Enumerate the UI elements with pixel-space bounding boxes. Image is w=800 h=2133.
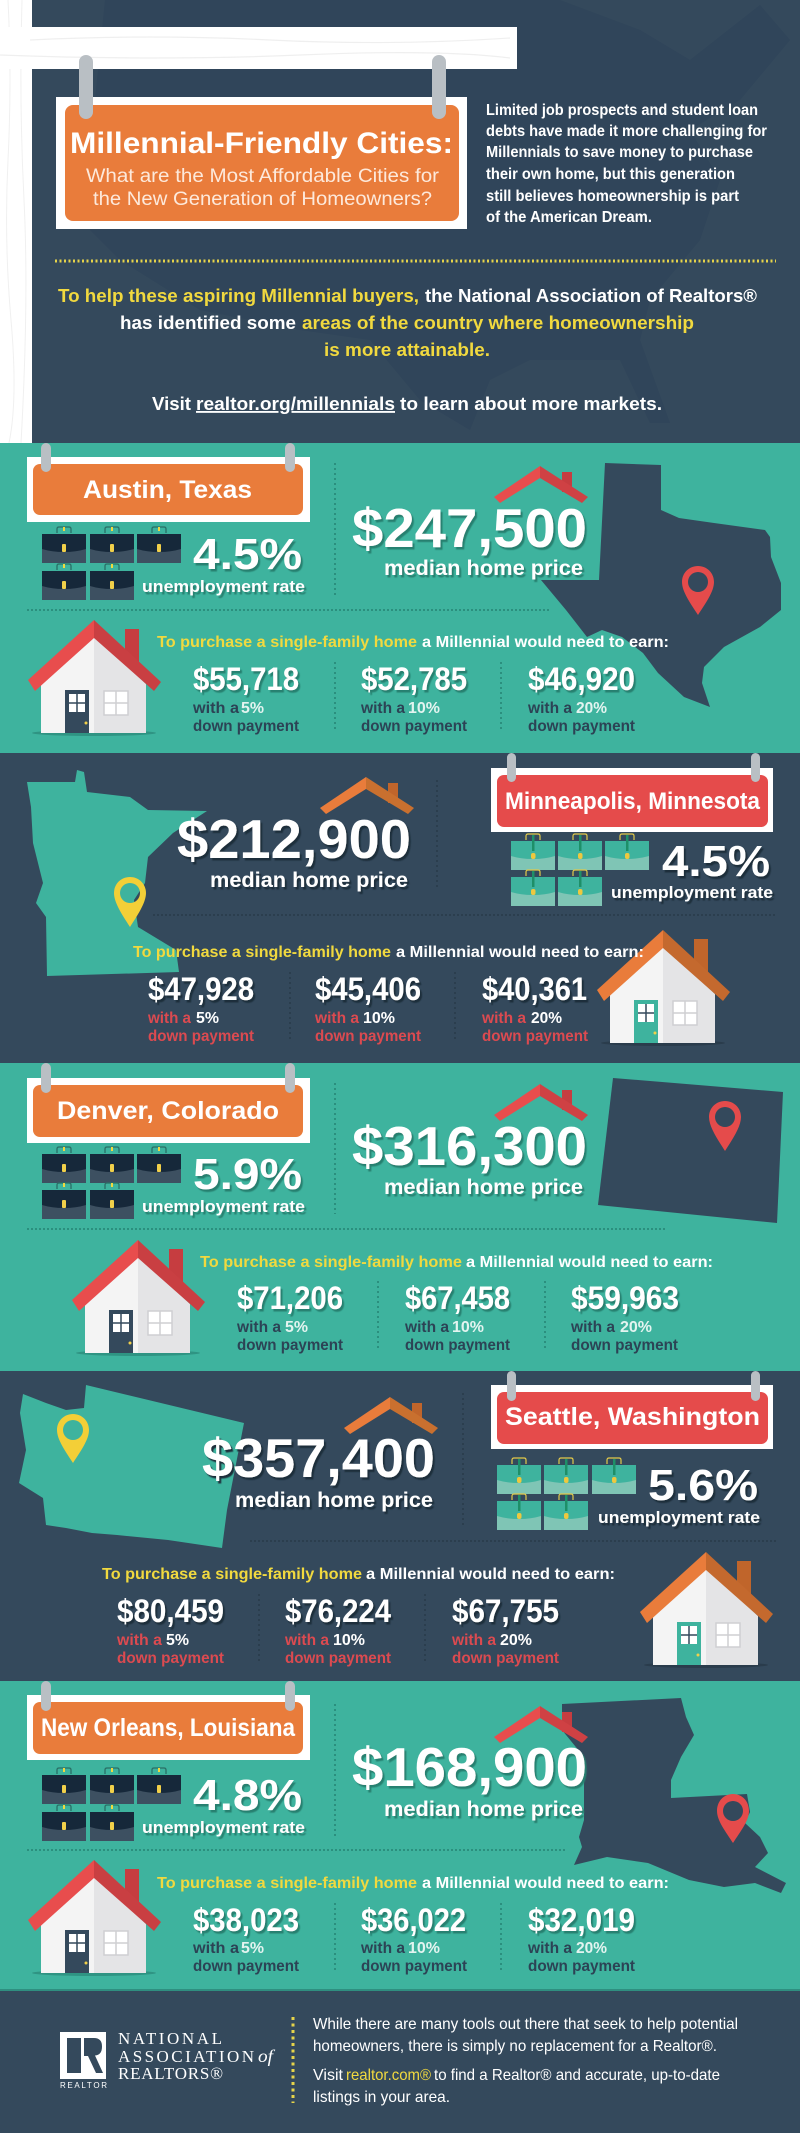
income block: 5% — [241, 1940, 264, 1957]
income block: $67,458 — [405, 1280, 510, 1316]
pin — [717, 1794, 749, 1843]
income block: 5% — [166, 1632, 189, 1649]
unemployment stat: 4.5% — [662, 837, 770, 886]
income block: $59,963 — [571, 1280, 679, 1316]
income block: down payment — [528, 1958, 635, 1975]
icon: roof — [494, 466, 588, 503]
closing text: listings in your area. — [313, 2089, 450, 2106]
city sign: New Orleans, Louisiana — [41, 1714, 296, 1742]
intro paragraph: Millennials to save money to purchase — [486, 144, 753, 161]
income block: with a — [236, 1319, 281, 1336]
income block: down payment — [528, 718, 635, 735]
median price: median home price — [210, 869, 408, 892]
income block: $67,755 — [452, 1593, 559, 1629]
intro paragraph: their own home, but this generation — [486, 166, 735, 183]
income block: with a — [527, 700, 572, 717]
income block: $52,785 — [361, 661, 467, 697]
income block: with a — [404, 1319, 449, 1336]
median price: $212,900 — [177, 808, 411, 870]
intro paragraph: debts have made it more challenging for — [486, 123, 767, 140]
logo: National Association of Realtors: REALTORS® — [118, 2064, 223, 2083]
median price: median home price — [384, 1798, 583, 1821]
panel: Seattle, Washington — [0, 1371, 800, 1681]
income block: a Millennial would need to earn: — [422, 634, 669, 651]
income block: 20% — [500, 1632, 532, 1649]
income block: down payment — [117, 1650, 224, 1667]
icon: house — [28, 620, 161, 736]
subtitle: the New Generation of Homeowners? — [93, 189, 432, 210]
income block: To purchase a single-family home — [157, 1875, 417, 1892]
icon: house — [640, 1552, 773, 1668]
panel: intro header — [0, 0, 800, 444]
NAR statement: is more attainable. — [324, 339, 490, 360]
icon: roof — [494, 1084, 588, 1121]
median price: $247,500 — [352, 497, 587, 559]
income block: with a — [284, 1632, 329, 1649]
city sign: Seattle, Washington — [505, 1403, 760, 1431]
income block: down payment — [361, 718, 467, 735]
income block: $36,022 — [361, 1902, 466, 1938]
income block: down payment — [315, 1028, 421, 1045]
city sign — [27, 1063, 310, 1143]
icon: briefcases — [42, 527, 181, 600]
panel: Denver, Colorado — [0, 1063, 800, 1371]
icon: roof — [320, 777, 414, 814]
icon: briefcases — [511, 834, 649, 906]
income block: 10% — [363, 1010, 395, 1027]
subtitle: What are the Most Affordable Cities for — [86, 166, 440, 187]
NAR statement — [58, 285, 757, 360]
icon: roof — [494, 1706, 588, 1743]
map: Louisiana — [562, 1698, 786, 1893]
panel: footer — [0, 1989, 800, 2133]
closing text: homeowners, there is simply no replacement for a Realtor®. — [313, 2038, 717, 2055]
unemployment stat — [142, 530, 305, 596]
map: Washington — [19, 1385, 244, 1548]
icon: roof — [344, 1397, 438, 1434]
income block: $46,920 — [528, 661, 635, 697]
income block: with a — [527, 1940, 572, 1957]
income block: with a — [192, 700, 239, 717]
unemployment stat — [142, 1150, 305, 1216]
intro paragraph: still believes homeownership is part — [486, 188, 739, 205]
link line: to learn about more markets. — [400, 393, 662, 414]
pin — [57, 1414, 89, 1463]
icon: briefcases — [42, 1768, 181, 1841]
NAR statement: has identified some — [120, 312, 296, 333]
icon: house — [28, 1860, 161, 1976]
income block: 5% — [196, 1010, 219, 1027]
income block: $32,019 — [528, 1902, 635, 1938]
unemployment stat — [611, 837, 773, 902]
income block: with a — [192, 1940, 239, 1957]
unemployment stat — [142, 1771, 305, 1837]
income block: $71,206 — [237, 1280, 343, 1316]
income block: with a — [116, 1632, 162, 1649]
income block: down payment — [571, 1337, 678, 1354]
income block: To purchase a single-family home — [133, 944, 391, 961]
closing text: While there are many tools out there that seek to help potential — [313, 2016, 738, 2033]
panel: Minneapolis, Minnesota — [0, 753, 800, 1063]
NAR statement: areas of the country where homeownership — [302, 312, 694, 333]
income block: down payment — [193, 1958, 299, 1975]
income block — [133, 944, 644, 1045]
income block: down payment — [482, 1028, 588, 1045]
unemployment stat — [598, 1461, 760, 1527]
income block: down payment — [405, 1337, 510, 1354]
income block: 20% — [576, 700, 607, 717]
closing text: to find a Realtor® and accurate, up-to-date — [434, 2067, 720, 2084]
subtitle — [86, 166, 440, 210]
income block: with a — [360, 1940, 405, 1957]
unemployment stat: 4.5% — [193, 530, 302, 579]
link line: Visit — [152, 393, 191, 414]
logo: National Association of Realtors: of — [258, 2046, 276, 2066]
income block: with a — [451, 1632, 496, 1649]
pin — [709, 1101, 741, 1151]
city sign: Minneapolis, Minnesota — [505, 788, 761, 815]
wooden board — [0, 27, 517, 69]
income block: down payment — [285, 1650, 391, 1667]
income block: down payment — [193, 718, 299, 735]
income block: $80,459 — [117, 1593, 224, 1629]
income block: with a — [147, 1010, 191, 1027]
income block: with a — [314, 1010, 359, 1027]
logo: National Association of Realtors: NATIONAL — [118, 2029, 222, 2048]
icon: briefcases — [497, 1458, 636, 1530]
income block: with a — [481, 1010, 526, 1027]
income block: 10% — [408, 700, 440, 717]
unemployment stat: 5.9% — [193, 1150, 302, 1199]
unemployment stat: unemployment rate — [142, 1197, 305, 1216]
city sign — [491, 753, 773, 832]
income block: To purchase a single-family home — [200, 1254, 462, 1271]
income block: down payment — [361, 1958, 467, 1975]
income block — [200, 1254, 713, 1354]
closing text: realtor.com® — [346, 2067, 431, 2084]
income block: 5% — [285, 1319, 308, 1336]
income block: down payment — [452, 1650, 559, 1667]
income block — [157, 1875, 669, 1975]
background: US map silhouette — [90, 0, 790, 430]
income block: 5% — [241, 700, 264, 717]
unemployment stat: unemployment rate — [598, 1508, 760, 1527]
pin — [682, 566, 714, 615]
title: Millennial-Friendly Cities: — [70, 127, 453, 160]
income block — [157, 634, 669, 735]
logo: National Association of Realtors — [60, 2029, 276, 2090]
median price: median home price — [235, 1489, 433, 1512]
income block: $55,718 — [193, 661, 299, 697]
median price: $316,300 — [352, 1115, 587, 1177]
intro paragraph: of the American Dream. — [486, 209, 652, 226]
closing text: Visit — [313, 2067, 344, 2084]
intro paragraph — [486, 102, 767, 226]
income block: 10% — [408, 1940, 440, 1957]
income block: with a — [570, 1319, 615, 1336]
income block: 10% — [452, 1319, 484, 1336]
median price: $168,900 — [352, 1736, 587, 1798]
income block: 10% — [333, 1632, 365, 1649]
wooden post — [0, 0, 32, 443]
income block: a Millennial would need to earn: — [422, 1875, 669, 1892]
city sign — [27, 1681, 310, 1760]
unemployment stat: 4.8% — [193, 1771, 302, 1820]
income block: $38,023 — [193, 1902, 299, 1938]
city sign — [491, 1371, 773, 1449]
link line: realtor.org/millennials — [196, 393, 395, 414]
panel: New Orleans, Louisiana — [0, 1681, 800, 1991]
unemployment stat: unemployment rate — [142, 577, 305, 596]
median price: median home price — [384, 557, 583, 580]
income block: $47,928 — [148, 971, 254, 1007]
unemployment stat: unemployment rate — [611, 883, 773, 902]
income block: To purchase a single-family home — [102, 1566, 362, 1583]
city sign — [27, 443, 310, 522]
income block: To purchase a single-family home — [157, 634, 417, 651]
unemployment stat: unemployment rate — [142, 1818, 305, 1837]
income block: 20% — [531, 1010, 562, 1027]
income block: down payment — [148, 1028, 254, 1045]
income block: a Millennial would need to earn: — [396, 944, 644, 961]
income block — [102, 1566, 615, 1667]
income block: down payment — [237, 1337, 343, 1354]
map: Minnesota — [27, 770, 207, 976]
NAR statement: the National Association of Realtors® — [425, 285, 757, 306]
intro paragraph: Limited job prospects and student loan — [486, 102, 758, 119]
pin — [114, 877, 146, 927]
title sign — [56, 55, 467, 229]
unemployment stat: 5.6% — [648, 1461, 758, 1510]
income block: $76,224 — [285, 1593, 391, 1629]
icon: briefcases — [42, 1147, 181, 1219]
income block: 20% — [576, 1940, 607, 1957]
income block: with a — [360, 700, 405, 717]
median price: $357,400 — [202, 1427, 435, 1489]
logo: National Association of Realtors: REALTOR — [60, 2081, 107, 2090]
map: Colorado — [598, 1078, 783, 1223]
icon: house — [597, 930, 730, 1046]
panel: Austin, Texas — [0, 443, 800, 753]
income block: $40,361 — [482, 971, 587, 1007]
NAR statement: To help these aspiring Millennial buyers, — [58, 285, 419, 306]
logo: National Association of Realtors: ASSOCIATION — [118, 2047, 254, 2066]
icon: house — [72, 1240, 205, 1356]
median price: median home price — [384, 1176, 583, 1199]
city sign: Austin, Texas — [83, 476, 252, 504]
income block: 20% — [620, 1319, 652, 1336]
income block: $45,406 — [315, 971, 421, 1007]
closing text — [313, 2016, 738, 2106]
link line — [152, 393, 662, 414]
map: Texas — [541, 463, 781, 707]
income block: a Millennial would need to earn: — [466, 1254, 713, 1271]
income block: a Millennial would need to earn: — [366, 1566, 615, 1583]
city sign: Denver, Colorado — [57, 1097, 279, 1125]
